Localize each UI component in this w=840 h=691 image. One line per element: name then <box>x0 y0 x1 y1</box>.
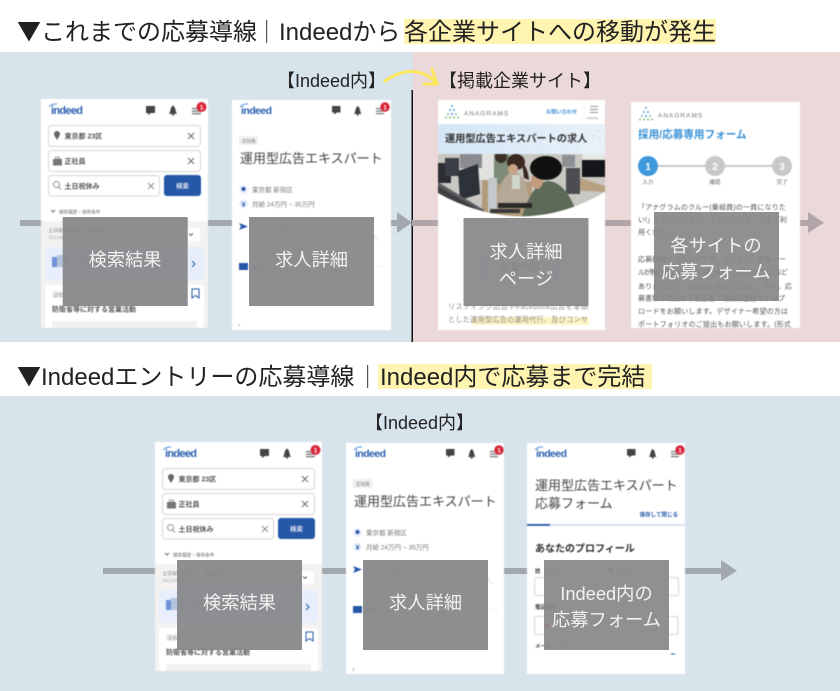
name fields: 名 <box>608 567 614 575</box>
form intro text: 用ください。 <box>638 228 681 236</box>
easy apply: カンタン応募 <box>251 222 290 231</box>
heading: current application flow: これまでの応募導線 <box>41 19 257 46</box>
form title <box>535 478 678 511</box>
salary: 月給 24万円 ~ 35万円 <box>366 542 429 552</box>
hero banner <box>438 124 605 154</box>
name fields <box>534 567 678 596</box>
job title: 運用型広告エキスパート <box>240 151 383 166</box>
recruitment section: 募集について <box>252 262 291 271</box>
results summary: 353,000件以上の求人 <box>162 577 208 584</box>
results summary: 関連性順 <box>278 574 297 582</box>
overlay: job detail <box>249 217 374 306</box>
overlay: search results <box>63 217 188 306</box>
results summary: 土日祝休みの求人 - 東京都 23区 <box>48 227 116 234</box>
email field: メール <box>535 644 552 650</box>
email field: (必須) <box>554 643 566 650</box>
overlay: job detail (lower): 求人詳細 <box>389 592 462 613</box>
arrow: lower flow <box>103 560 737 581</box>
easy apply: プロフィールの入力だけで応募できる求人です。 <box>365 577 496 585</box>
section heading: job description: 仕事内容 <box>500 261 540 274</box>
job card: 正社員 <box>54 292 68 298</box>
profile heading: あなたのプロフィール <box>535 543 635 555</box>
form intro text <box>638 202 792 328</box>
search button <box>278 518 315 539</box>
step indicator: 3 <box>779 162 785 173</box>
hero banner: 運用型広告エキスパートの求人 <box>445 132 588 145</box>
job card: 正社員 <box>168 634 182 642</box>
header icons: 1 <box>200 104 204 111</box>
contact link: お問い合わせ <box>546 108 577 116</box>
logo: indeed: indeed <box>165 448 197 460</box>
header icons: 1 <box>497 448 501 454</box>
overlay: job detail (lower) <box>363 560 488 650</box>
label: inside Indeed, lower flow: 【Indeed内】 <box>365 413 474 433</box>
arrow: yellow curve from Indeed to company site <box>385 69 437 84</box>
results summary: 353,000件以上の求人 <box>48 234 94 241</box>
phone field <box>534 603 678 634</box>
heading: current application flow <box>17 12 716 47</box>
overlay: Indeed form: Indeed内の <box>560 583 653 604</box>
overlay: search results (lower): 検索結果 <box>203 592 276 613</box>
label: listed company site: 【掲載企業サイト】 <box>439 71 601 91</box>
recruitment section <box>239 262 383 271</box>
body text with highlight: とした運用型広告の運用代行、及びコンサ <box>448 315 588 324</box>
screen: Indeed job detail (upper) <box>232 100 391 330</box>
form title: 運用型広告エキスパート <box>535 478 678 493</box>
tag: full-time: 正社員 <box>242 138 256 144</box>
header icons <box>146 102 206 116</box>
divider line between Indeed and company site <box>412 90 413 342</box>
logo: indeed: indeed <box>51 105 83 117</box>
results summary <box>162 570 314 585</box>
promo card: 閲覧した求人を確認できます <box>78 258 169 267</box>
search history row <box>51 208 101 216</box>
job card: 防衛省等に対する営業活動 <box>52 304 136 314</box>
heading: current application flow: 各企業サイトへの移動が発生 <box>404 19 716 46</box>
results summary <box>48 227 200 242</box>
name fields: 姓 <box>535 567 541 575</box>
search button <box>164 175 201 196</box>
body text with highlight: リスティング広告やFacebook広告を筆頭 <box>448 302 589 311</box>
overlay: search results: 検索結果 <box>88 249 162 270</box>
overlay: Indeed form <box>544 560 669 650</box>
logo: ANAGRAMS <box>445 105 509 118</box>
search field: location <box>48 126 200 146</box>
promo card <box>45 247 204 280</box>
heading: current application flow: Indeedから <box>279 19 400 46</box>
header icons: 1 <box>678 448 682 454</box>
salary: ¥ <box>356 544 360 552</box>
screen: Indeed search results (upper) <box>41 99 208 328</box>
header icons: 1 <box>314 447 318 454</box>
search field: employment type <box>48 150 200 172</box>
overlay: company form <box>654 212 779 301</box>
location <box>239 185 293 194</box>
menu icon: menu <box>587 116 599 120</box>
name fields: (必須) <box>618 568 630 575</box>
logo: indeed: indeed <box>355 448 386 460</box>
search field: employment type: 正社員 <box>64 156 86 166</box>
overlay: search results (lower) <box>177 560 302 650</box>
promo card: 閲覧した求人を確認できます <box>192 601 283 610</box>
heading: Indeed entry application flow: Indeed内で応募まで完結 <box>380 364 645 391</box>
search field: location: 東京都 23区 <box>178 474 216 484</box>
screen: Indeed search results (lower) <box>155 442 322 671</box>
salary: 月給 24万円 ~ 35万円 <box>252 200 315 208</box>
header icons <box>332 102 390 116</box>
search button: 検索 <box>176 181 190 190</box>
location: 東京都 新宿区 <box>252 185 293 194</box>
header icons <box>260 445 320 459</box>
screen: Indeed job detail (lower) <box>346 443 504 674</box>
name fields: (必須) <box>545 568 557 575</box>
results summary: 関連性順 <box>164 232 183 238</box>
step indicator: 入力 <box>642 178 654 186</box>
step indicator: 確認 <box>709 178 721 186</box>
search field: employment type: 正社員 <box>178 500 200 508</box>
overlay: job page: 求人詳細 <box>489 241 563 262</box>
overlay: company form: 各サイトの <box>670 235 762 256</box>
logo: ANAGRAMS: ANAGRAMS <box>658 112 703 120</box>
easy apply <box>239 222 382 242</box>
search history row: 検索履歴・保存条件 <box>173 552 215 558</box>
heading: current application flow: ▼ <box>17 12 41 47</box>
search history row: 検索履歴・保存条件 <box>59 208 101 216</box>
recruitment section <box>353 605 497 614</box>
tag: full-time <box>239 136 258 145</box>
heading: Indeed entry application flow: Indeedエントリーの応募導線 <box>41 364 354 391</box>
form intro text: ロードをお願いします。デザイナー希望の方は <box>638 306 788 316</box>
header icons <box>627 445 685 459</box>
section heading: job description <box>485 257 557 279</box>
panel: current flow, Indeed side <box>0 52 413 342</box>
form title: 採用/応募専用フォーム <box>638 128 747 141</box>
search field: keyword: 土日祝休み <box>64 182 100 190</box>
overlay: job page: ページ <box>499 268 553 289</box>
job card <box>45 285 204 328</box>
location <box>353 528 407 537</box>
search button: 検索 <box>290 524 304 533</box>
salary: ¥ <box>242 202 246 208</box>
header icons: 1 <box>383 105 387 111</box>
job title: 運用型広告エキスパート <box>354 494 497 509</box>
body text with highlight <box>448 302 589 325</box>
easy apply: カンタン応募 <box>365 565 404 574</box>
form intro text: い!」と思われた方は、こちらのフォームをご利 <box>638 215 787 224</box>
overlay: job page <box>464 218 588 306</box>
easy apply: プロフィールの入力だけで応募できる求人です。 <box>251 234 382 242</box>
form intro text: ポートフォリオのご提出もお願いします。(形式 <box>638 320 791 328</box>
tag: full-time <box>353 479 372 488</box>
photo: office workers at monitors <box>437 153 606 218</box>
heading: Indeed entry application flow <box>17 357 652 392</box>
search field: keyword: 土日祝休み <box>178 524 214 534</box>
step indicator: 2 <box>712 162 718 173</box>
email field <box>535 643 675 654</box>
screen: company application form <box>631 102 800 328</box>
phone field: 電話番号 <box>535 603 558 611</box>
arrow: upper flow, company side <box>412 212 824 233</box>
logo: indeed: indeed <box>536 448 567 460</box>
menu icon <box>584 100 599 124</box>
job card <box>159 628 318 671</box>
search field: keyword <box>48 176 160 196</box>
form intro text: ありましたらご自由にお書きください。また、応 <box>638 282 792 290</box>
screen: Indeed application form <box>527 443 685 674</box>
job card: 防衛省等に対する営業活動 <box>166 648 250 656</box>
results summary: 土日祝休みの求人 - 東京都 23区 <box>162 570 230 577</box>
heading: Indeed entry application flow: ▼ <box>17 357 41 392</box>
logo: indeed: indeed <box>241 105 272 117</box>
search field: location <box>162 468 314 490</box>
panel: Indeed entry flow <box>0 396 840 691</box>
location: 東京都 新宿区 <box>366 528 407 537</box>
step indicator <box>638 156 792 186</box>
form intro text: ルが無い場合はなくても構いません。自己アピールなど <box>638 268 788 276</box>
promo card <box>159 590 318 623</box>
tag: full-time: 正社員 <box>356 480 370 488</box>
logo: ANAGRAMS <box>639 107 703 120</box>
label: inside Indeed: 【Indeed内】 <box>277 71 386 91</box>
progress bar <box>527 524 685 526</box>
search field: keyword <box>162 518 274 539</box>
form title: 応募フォーム <box>535 496 613 511</box>
salary <box>239 200 315 208</box>
recruitment section: 募集について <box>366 605 405 614</box>
overlay: company form: 応募フォーム <box>661 261 771 282</box>
arrow: upper flow, Indeed side <box>20 212 412 233</box>
search field: location: 東京都 23区 <box>64 132 102 140</box>
salary <box>353 542 429 552</box>
step indicator: 完了 <box>776 179 788 186</box>
search field: employment type <box>162 494 314 514</box>
search history row <box>165 552 215 558</box>
form intro text: 募書類の項目から履歴書・職務経歴書のアップ <box>638 294 785 302</box>
panel: current flow, company site side <box>413 52 840 342</box>
easy apply <box>353 565 496 585</box>
step indicator: 1 <box>645 162 651 173</box>
form intro text: 応募動機は自由形式で構いませんが、応募メー <box>638 254 786 264</box>
screen: company job page <box>438 100 605 330</box>
save and close link: 保存して閉じる <box>640 510 678 518</box>
header icons <box>446 445 504 459</box>
form intro text: 「アナグラムのクルー(乗組員)の一員になりた <box>638 202 786 212</box>
logo: ANAGRAMS: ANAGRAMS <box>464 110 509 118</box>
overlay: Indeed form: 応募フォーム <box>552 609 661 630</box>
overlay: job detail: 求人詳細 <box>275 249 348 270</box>
